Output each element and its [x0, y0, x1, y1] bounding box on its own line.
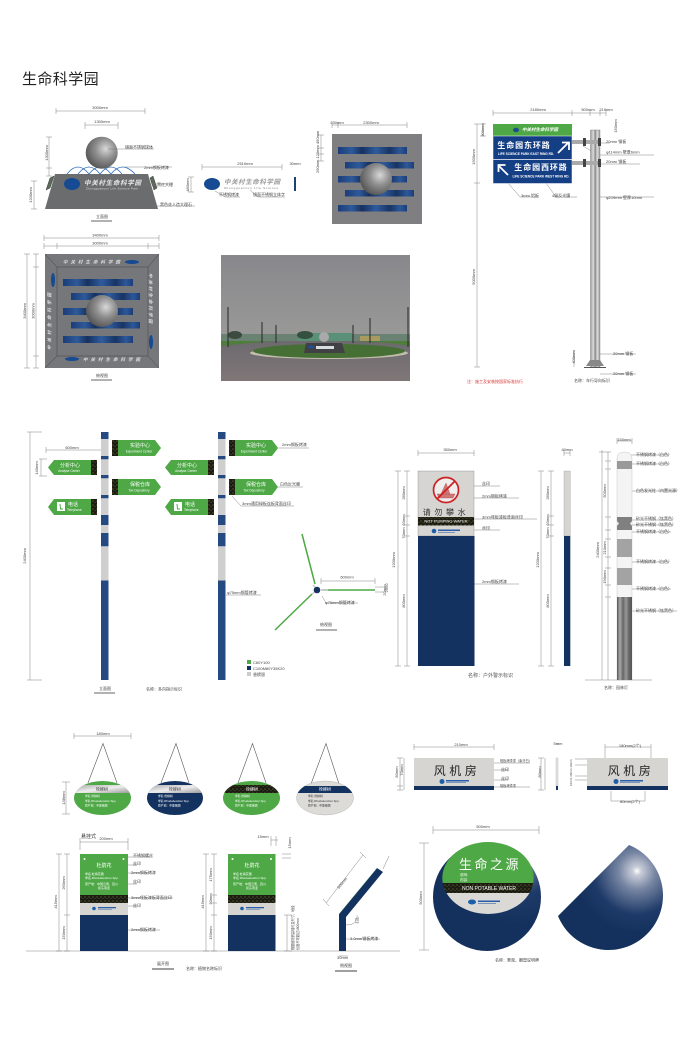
panel: plant name sign back: [200, 834, 300, 951]
panel: landscape description plate front: 名称：景观、雕塑说明牌: [495, 956, 539, 962]
panel: sculpture elevation: 镜面不锈钢球体: [125, 144, 153, 150]
label 3: green and speckle: 原产地：中亚苗圃: [235, 804, 258, 808]
panel: sculpture plan top right: 2300mm: [363, 120, 379, 125]
sphere: [86, 137, 118, 169]
panel: road direction sign: [467, 107, 654, 384]
panel: multi-direction signpost back: φ75mm钢管烤漆: [227, 589, 257, 595]
panel: outdoor warning sign front: NOT PUMPING WATER: [424, 518, 468, 524]
panel: sculpture top view: 中关村生命科学园: [47, 292, 52, 350]
panel: outdoor warning sign front: 280mm: [401, 486, 406, 500]
panel: multi-direction signpost back: 电话: [185, 501, 195, 508]
pole: [590, 130, 600, 367]
panel: garden lamp: 190mm: [602, 570, 607, 584]
panel: room plate front: 80mm: [394, 766, 399, 778]
panel: plant name sign side: 135°: [354, 915, 360, 924]
base logo: [64, 178, 80, 190]
panel: room plate front: 210mm: [454, 742, 468, 747]
sign: Telephone: [48, 499, 97, 515]
panel: road direction sign: 名称：车行导向标识: [574, 377, 610, 383]
panel: landscape description plate front: 500mm: [418, 891, 423, 905]
panel: garden lamp: 砂光不锈钢（钛黑色）: [636, 515, 676, 521]
panel: sculpture elevation: 立面图: [96, 213, 108, 219]
label 1: green and steel: [74, 744, 131, 815]
panel: plant name sign back: 根据植物的高矮可变尺寸，地段: [290, 905, 295, 950]
panel: garden lamp: 不锈钢烤漆（白色）: [636, 451, 672, 457]
sign: Experiment Center: [112, 440, 161, 456]
panel: sculpture top view: 中关村生命科学园: [63, 260, 122, 264]
label 3: green and speckle: 学名:Rhododendron Spp.: [235, 799, 267, 803]
panel: plant name sign side: 30mm: [337, 955, 349, 960]
panel: road direction sign: LIFE SCIENCE PARK WEST RING RD.: [513, 174, 570, 178]
sign: Analyse Center: 分析中心: [60, 462, 80, 469]
panel: outdoor warning sign side: 60mm: [545, 514, 550, 526]
panel: logo lettering detail: 镜面不锈钢立体字: [253, 191, 285, 197]
panel: sculpture elevation: 1300mm: [44, 145, 49, 161]
panel: plant name sign back: 学名:杜鹃花属: [233, 871, 252, 876]
label 3: green and speckle: 学名:栓柳树: [235, 794, 250, 798]
panel: hanging tree labels: 138mm: [61, 791, 66, 805]
sign: Experiment Center: Experiment Center: [126, 450, 153, 454]
panel: plant name sign front: 不锈钢螺丝: [133, 852, 153, 858]
panel: room plate back: 风机房: [608, 763, 654, 778]
panel: logo lettering detail: 30mm: [289, 161, 301, 166]
panel: road direction sign: 1500mm: [471, 149, 476, 165]
panel: multi-direction signpost front: 名称：多向指示标识: [146, 686, 182, 692]
panel: garden lamp: 不锈钢烤漆（白色）: [636, 558, 672, 564]
panel: outdoor warning sign front: 60mm: [401, 514, 406, 526]
panel: road direction sign: 注：施工及安装按国家标准执行: [467, 378, 523, 384]
panel: plant name sign front: 丝印: [133, 860, 141, 866]
panel: road direction sign: 20mm 钢板: [606, 158, 626, 164]
panel: landscape description plate front: 生命之源: [459, 857, 521, 872]
label 1: green and steel: 学名:Rhododendron Spp.: [85, 799, 117, 803]
panel: outdoor warning sign front: 丝印: [482, 480, 490, 486]
legend: colours: C100M80Y35K20: [253, 666, 285, 671]
panel: sculpture plan top right: 230mm: [330, 120, 344, 125]
panel: signpost plan view: 20mm: [382, 584, 387, 596]
panel: sculpture top view: 俯视图: [96, 372, 108, 378]
panel: road direction sign: 300mm: [480, 123, 485, 137]
sign: Analyse Center: Analyse Center: [58, 469, 81, 473]
sign: Telephone: Telephone: [67, 508, 82, 512]
panel: landscape description plate front: 说明:: [460, 872, 468, 877]
legend: colours: [247, 660, 285, 677]
panel: outdoor warning sign front: 1200mm: [391, 552, 396, 568]
panel: sculpture top view: 中关村生命科学园: [83, 357, 142, 362]
panel: sculpture elevation: 1300mm: [94, 119, 110, 124]
panel: road direction sign: 2180mm: [530, 107, 546, 112]
prohibition icon: [434, 478, 458, 502]
panel: sculpture plan top right: [315, 120, 422, 224]
panel: road direction sign: 20mm 钢板: [606, 138, 626, 144]
panel: outdoor warning sign front: 丝印: [482, 524, 490, 530]
panel: plant name sign front: 原产地：中国云南、四川: [85, 881, 118, 886]
panel: plant name sign front: 3mm哑板漆板背面丝印: [131, 894, 172, 900]
panel: plant name sign back: 学名:Rhododendron Spp.: [233, 875, 267, 880]
legend: colours: 香槟银: [253, 671, 265, 677]
pole: [101, 432, 108, 680]
panel: plant name sign front: 悬挂式: [81, 833, 96, 840]
panel: landscape description plate front: 500mm: [476, 824, 490, 829]
panel: plant name sign side: [323, 852, 389, 971]
panel: room plate front: 70mm: [399, 764, 404, 776]
label 2: navy and steel: 学名:Rhododendron Spp.: [158, 799, 190, 803]
panel: road direction sign: 219mm: [599, 107, 613, 112]
panel: multi-direction signpost front: [22, 432, 182, 693]
panel: landscape description plate front: 内容:: [460, 877, 468, 882]
panel: outdoor warning sign front: 2mm钢板烤漆: [482, 492, 507, 498]
blue arches: [67, 167, 135, 174]
label 3: green and speckle: [223, 744, 280, 815]
sign: Tax Depository: [112, 479, 161, 495]
sign: Telephone: 电话: [68, 501, 78, 508]
panel: plant name sign back: 15mm: [257, 834, 269, 839]
label 2: navy and steel: 原产地：中亚苗圃: [158, 804, 181, 808]
panel: plant name sign side: 500mm: [336, 876, 349, 890]
panel: room plate side: 5mm: [554, 741, 563, 746]
panel: multi-direction signpost back: 保税仓库: [246, 481, 266, 488]
panel: sculpture plan top right: 260mm 120mm 450mm: [315, 130, 320, 173]
label 4: grey and navy: 原产地：中亚苗圃: [308, 804, 331, 808]
panel: outdoor warning sign side: 70mm: [545, 527, 550, 539]
panel: sculpture elevation: 2mm钢板烤漆: [144, 164, 169, 170]
panel: outdoor warning sign side: 1200mm: [535, 552, 540, 568]
label 4: grey and navy: 学名:Rhododendron Spp.: [308, 799, 340, 803]
panel: logo lettering detail: 中关村生命科学园: [224, 178, 282, 186]
photo of roundabout: [221, 255, 410, 381]
panel: garden lamp: [585, 437, 680, 690]
panel: road direction sign: 400mm: [571, 350, 576, 364]
panel: room plate front: 哑板烤漆漆（象牙白）: [500, 758, 532, 763]
panel: multi-direction signpost front: 600mm: [65, 445, 79, 450]
panel: garden lamp: 210mm: [602, 541, 607, 555]
panel: sculpture elevation: 黑色花人造大理石: [160, 201, 192, 207]
panel: garden lamp: 不锈钢烤漆（白色）: [636, 528, 672, 534]
panel: sculpture elevation: [28, 105, 195, 221]
panel: logo lettering detail: Zhongguancun Life Science: [224, 186, 278, 190]
panel: multi-direction signpost front: 140mm: [34, 461, 39, 475]
panel: room plate front: 哑板烤漆漆: [500, 783, 517, 788]
panel: road direction sign: φ219mm 壁厚10mm: [606, 194, 643, 200]
panel: signpost plan view: 600mm: [340, 574, 354, 580]
sign: Tax Depository: 保税仓库: [130, 481, 150, 488]
panel: road direction sign: 500mm: [581, 107, 595, 112]
panel: sculpture elevation: 中关村生命科学园: [84, 179, 142, 187]
label 2: navy and steel: 栓柳树: [169, 786, 181, 792]
panel: landscape description plate front: NON POTABLE WATER: [462, 886, 516, 892]
panel: road direction sign: LIFE SCIENCE PARK EAST RING RD.: [498, 152, 554, 156]
panel: outdoor warning sign side: [535, 447, 573, 666]
panel: sculpture top view: 3000mm: [92, 240, 108, 246]
panel: signpost plan view: φ75mm钢管烤漆: [325, 599, 355, 605]
sign: Analyse Center: [48, 460, 97, 475]
panel: hanging tree labels: [61, 731, 354, 815]
panel: plant name sign front: 丝印: [133, 878, 141, 884]
panel: sculpture elevation: 3000mm: [92, 105, 108, 110]
green header: [493, 124, 572, 136]
panel: sculpture top view: 中关村生命科学园: [148, 273, 153, 324]
panel: outdoor warning sign front: 3mm哑板漆板背面丝印: [482, 514, 523, 520]
panel: plant name sign back: 杜鹃花: [244, 862, 260, 869]
sign: Experiment Center: 实验中心: [130, 442, 150, 449]
panel: multi-direction signpost back: Telephone: [184, 508, 199, 512]
label 1: green and steel: 原产地：中亚苗圃: [85, 804, 108, 808]
panel: plant name sign side: 侧视图: [340, 962, 352, 968]
panel: road direction sign: 生命园东环路: [497, 140, 551, 150]
panel: outdoor warning sign front: [384, 447, 537, 679]
panel: garden lamp: 不锈钢烤漆（白色）: [636, 460, 672, 466]
panel: road direction sign: 150mm: [613, 119, 618, 133]
label 2: navy and steel: [147, 744, 203, 815]
panel: signpost plan view: [275, 534, 387, 630]
panel: road direction sign: φ114mm 壁厚6mm: [606, 148, 640, 154]
panel: multi-direction signpost front: 2400mm: [22, 548, 27, 564]
label 2: navy and steel: 学名:栓柳树: [158, 794, 173, 798]
panel: plant name sign back: 415mm: [200, 895, 205, 909]
panel: room plate front: [394, 742, 532, 790]
panel: outdoor warning sign side: 800mm: [545, 594, 550, 608]
panel: logo lettering detail: 480mm: [185, 178, 190, 192]
panel: plant name sign side: 3.0mm钢板烤漆: [350, 935, 378, 941]
panel: plant name sign back: 175mm: [208, 868, 213, 882]
panel: plant name sign front: 200mm: [99, 836, 113, 841]
legend: colours: C60Y100: [253, 660, 270, 665]
title: 生命科学园: [22, 70, 99, 88]
label 1: green and steel: 学名:栓柳树: [85, 794, 100, 798]
panel: logo lettering detail: 不锈钢烤漆: [219, 191, 239, 197]
panel: outdoor warning sign side: 40mm: [561, 447, 573, 452]
panel: landscape description plate side: [558, 845, 663, 950]
panel: room plate back: 80mm(2个): [620, 799, 641, 804]
panel: outdoor warning sign front: 800mm: [401, 594, 406, 608]
panel: road direction sign: 5000mm: [471, 269, 476, 285]
panel: sculpture top view: 3000mm: [30, 303, 36, 319]
panel: plant name sign front: 名称：植物名称标识: [186, 965, 222, 971]
panel: plant name sign back: 原产地：中国云南、四川: [233, 881, 266, 886]
panel: outdoor warning sign side: 280mm: [545, 486, 550, 500]
panel: garden lamp: 名称：园林灯: [604, 684, 628, 690]
panel: room plate side: 80mm: [537, 766, 542, 778]
panel: plant name sign front: 150mm: [61, 926, 66, 940]
panel: garden lamp: 白色发光柱（内置光源）: [636, 487, 680, 493]
panel: sculpture top view: 3400mm: [22, 303, 27, 319]
panel: multi-direction signpost back: 3mm通用绿板连板背面丝印: [242, 500, 291, 506]
panel: outdoor warning sign front: 350mm: [443, 447, 457, 452]
panel: plant name sign front: [26, 833, 400, 971]
panel: road direction sign: 4级反光膜: [552, 192, 570, 198]
trapezoid base: [45, 174, 158, 209]
label 1: green and steel: 栓柳树: [96, 786, 108, 792]
panel: road direction sign: 20mm 钢板: [613, 350, 633, 356]
panel: garden lamp: 150mm: [617, 437, 631, 442]
arrows: [558, 142, 569, 153]
panel: plant name sign front: 学名:Rhododendron Spp.: [85, 875, 119, 880]
panel: sculpture top view: [22, 232, 159, 380]
panel: plant name sign front: 2mm钢板烤漆: [131, 926, 156, 932]
panel: room plate back: [569, 743, 668, 804]
panel: plant name sign front: 和东南亚: [98, 885, 110, 890]
panel: room plate side: [537, 741, 563, 790]
panel: outdoor warning sign front: 2mm钢板烤漆: [482, 578, 507, 584]
panel: multi-direction signpost back: [165, 432, 309, 680]
panel: garden lamp: 500mm: [602, 484, 607, 498]
panel: hanging tree labels: 180mm: [96, 731, 110, 736]
panel: outdoor warning sign front: 名称：户外警示标识: [468, 672, 513, 679]
panel: plant name sign back: 和东南亚: [246, 885, 258, 890]
panel: sculpture elevation: 1200mm: [28, 187, 33, 203]
panel: plant name sign back: 15mm: [287, 837, 292, 849]
panel: plant name sign front: 415mm: [53, 895, 58, 909]
panel: road direction sign: 3mm 铝板: [521, 192, 539, 198]
panel: multi-direction signpost back: 白色反光膜: [280, 480, 300, 486]
panel: room plate back: 180mm(2个): [619, 743, 642, 748]
panel: logo lettering detail: [185, 161, 301, 197]
panel: plant name sign back: 30mm: [208, 893, 213, 905]
blue panel: [493, 136, 572, 184]
panel: plant name sign front: 丝印: [133, 902, 141, 908]
panel: multi-direction signpost back: 实验中心: [246, 442, 266, 449]
panel: garden lamp: 不锈钢烤漆（白色）: [636, 585, 672, 591]
panel: multi-direction signpost back: Experiment Center: [241, 450, 268, 454]
panel: outdoor warning sign front: 2950: [384, 583, 389, 592]
panel: plant name sign back: 长度不得超过1800mm: [295, 918, 300, 950]
panel: sculpture top view: 3400mm: [92, 232, 108, 238]
panel: sculpture elevation: 黑红大理: [157, 181, 173, 187]
panel: logo lettering detail: 2510mm: [237, 161, 253, 166]
label 4: grey and navy: 栓柳树: [319, 786, 331, 792]
panel: multi-direction signpost back: 分析中心: [177, 462, 197, 469]
panel: multi-direction signpost back: Tax Depository: [243, 488, 265, 492]
panel: plant name sign front: 展开图: [157, 960, 169, 966]
panel: signpost plan view: 俯视图: [320, 621, 332, 627]
panel: garden lamp: 砂光不锈钢（钛黑色）: [636, 521, 676, 527]
panel: road direction sign: 生命园西环路: [514, 162, 568, 172]
panel: plant name sign front: 2mm钢板烤漆: [131, 869, 156, 875]
panel: road direction sign: 20mm 钢板: [613, 370, 633, 376]
panel: room plate back: 10mm 38mm 10mm: [569, 759, 573, 786]
panel: plant name sign back: 150mm: [208, 926, 213, 940]
label 4: grey and navy: 学名:栓柳树: [308, 794, 323, 798]
panel: plant name sign front: 学名:杜鹃花属: [85, 871, 104, 876]
panel: outdoor warning sign front: 70mm: [401, 527, 406, 539]
panel: garden lamp: 2400mm: [595, 542, 600, 558]
panel: sculpture elevation: Zhongguancun Life Science Park: [86, 186, 138, 190]
panel: multi-direction signpost back: 2mm钢板烤漆: [282, 441, 307, 447]
panel: road direction sign: 中关村生命科学园: [522, 127, 559, 132]
label 3: green and speckle: 栓柳树: [246, 786, 258, 792]
panel: plant name sign front: 260mm: [61, 876, 66, 890]
panel: outdoor warning sign front: 请勿攀水: [423, 507, 469, 517]
panel: room plate front: 丝印: [501, 766, 509, 772]
label 4: grey and navy: [296, 744, 354, 815]
panel: garden lamp: 砂光不锈钢（钛黑色）: [636, 607, 676, 613]
sign: Tax Depository: Tax Depository: [128, 488, 150, 492]
panel: room plate front: 风机房: [434, 763, 480, 778]
panel: multi-direction signpost front: 立面图: [99, 685, 111, 691]
panel: plant name sign front: 杜鹃花: [96, 862, 112, 869]
panel: multi-direction signpost back: Analyse Center: [175, 469, 198, 473]
panel: landscape description plate front: [418, 824, 541, 962]
panel: room plate front: 丝印: [501, 775, 509, 781]
